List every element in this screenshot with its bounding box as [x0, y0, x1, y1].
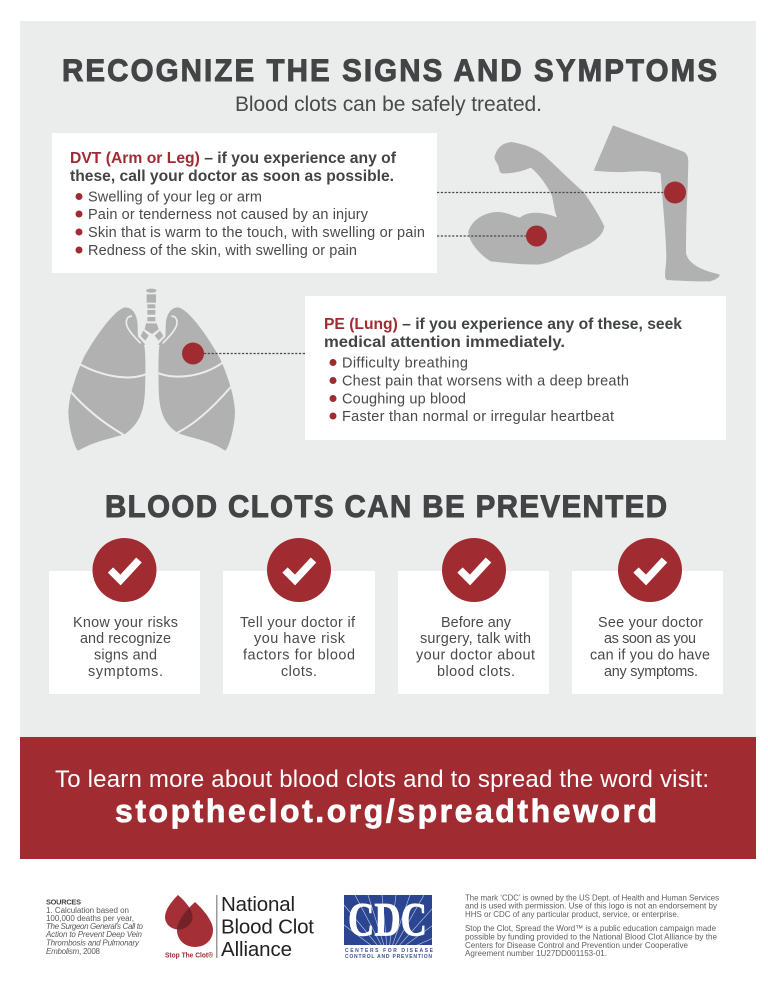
PE symptoms list: Coughing up blood — [342, 392, 466, 408]
PE symptoms list: Faster than normal or irregular heartbeat — [342, 409, 614, 425]
icon: check 2 — [267, 538, 331, 602]
CDC caption: CONTROL AND PREVENTION — [345, 954, 432, 960]
PE heading: medical attention immediately. — [324, 334, 565, 351]
sources: Action to Prevent Deep Vein — [45, 930, 143, 939]
DVT symptoms list: Skin that is warm to the touch, with swelling or pain — [88, 225, 425, 241]
card 4 text: as soon as you — [604, 631, 696, 647]
DVT symptoms list: Redness of the skin, with swelling or pain — [88, 243, 357, 259]
icon: arm — [468, 142, 604, 264]
title: RECOGNIZE THE SIGNS AND SYMPTOMS — [62, 52, 717, 88]
sources: Thrombosis and Pulmonary — [46, 938, 140, 948]
card 1 text: and recognize — [80, 631, 171, 647]
left lung — [68, 307, 145, 451]
heading: blood clots can be prevented: BLOOD CLOTS CAN BE PREVENTED — [105, 488, 667, 524]
DVT symptoms list: Pain or tenderness not caused by an injury — [88, 207, 369, 223]
card 1 text: symptoms. — [88, 664, 163, 680]
lung fissures — [71, 316, 232, 435]
card 4 text: any symptoms. — [604, 664, 698, 680]
icon: check 4 — [618, 538, 682, 602]
PE symptoms list — [330, 356, 629, 425]
card 1 text: Know your risks — [73, 615, 178, 631]
legal text: The mark ‘CDC’ is owned by the US Dept. of Health and Human Services — [465, 892, 719, 902]
DVT heading: these, call your doctor as soon as possible. — [70, 168, 394, 185]
card 4 text: can if you do have — [590, 648, 710, 664]
trachea — [137, 289, 166, 346]
panel: prevention card 1 — [49, 538, 200, 694]
CDC letters: CDC — [348, 894, 427, 946]
card 2 text: factors for blood — [243, 648, 355, 664]
panel: DVT — [52, 133, 437, 273]
icon: check 1 — [92, 538, 156, 602]
CDC caption — [345, 948, 434, 960]
icon: leg clot marker — [664, 182, 686, 204]
icon: leg — [594, 125, 720, 281]
PE symptoms list: Chest pain that worsens with a deep breath — [342, 374, 629, 390]
icon: check 3 — [442, 538, 506, 602]
legal text: Centers for Disease Control and Prevention under Cooperative — [465, 940, 688, 950]
panel: main background — [20, 21, 756, 737]
card 3 text: Before any — [441, 615, 512, 631]
right lung — [158, 307, 235, 451]
DVT heading: DVT (Arm or Leg) – if you experience any of — [70, 150, 394, 167]
legal text — [465, 892, 719, 958]
logo wordmark — [221, 893, 314, 961]
legal text: Stop the Clot, Spread the Word™ is a public education campaign made — [465, 923, 716, 933]
CDC caption: CENTERS FOR DISEASE — [345, 948, 434, 954]
card 2 text — [240, 615, 356, 680]
sources: Embolism, 2008 — [46, 947, 101, 956]
logo tagline: Stop The Clot® — [165, 950, 213, 960]
icon: blood drops — [165, 895, 213, 947]
card 3 text — [416, 615, 535, 680]
card 3 text: your doctor about — [416, 648, 535, 664]
legal text: possible by funding provided to the National Blood Clot Alliance by the — [465, 932, 717, 942]
legal text: Agreement number 1U27DD001153-01. — [465, 948, 607, 958]
sources — [45, 898, 144, 956]
sources: 100,000 deaths per year, — [46, 914, 134, 923]
call to action url: stoptheclot.org/spreadtheword — [115, 793, 657, 829]
card 1 text — [73, 615, 178, 680]
card 3 text: blood clots. — [437, 664, 515, 680]
card 2 text: you have risk — [254, 631, 346, 647]
card 1 text: signs and — [94, 648, 157, 664]
logo wordmark: National — [221, 893, 295, 916]
card 2 text: Tell your doctor if — [240, 615, 356, 631]
panel: prevention card 3 — [398, 538, 549, 694]
call to action text: To learn more about blood clots and to spread the word visit: — [55, 766, 709, 793]
sources: The Surgeon General's Call to — [46, 922, 144, 931]
icon: lung clot marker — [182, 342, 204, 364]
logo: CDC — [344, 895, 433, 958]
subtitle: Blood clots can be safely treated. — [235, 93, 542, 116]
icon: lungs illustration — [68, 289, 305, 451]
panel: PE — [305, 296, 726, 440]
panel: prevention card 2 — [223, 538, 375, 694]
icon: arm clot marker — [526, 226, 547, 246]
panel: call to action band — [20, 737, 756, 859]
icon: arm and leg illustration — [437, 125, 720, 281]
card 2 text: clots. — [281, 664, 317, 680]
card 4 text — [590, 615, 710, 680]
legal text: HHS or CDC of any particular product, service, or enterprise. — [465, 909, 679, 919]
sources: 1. Calculation based on — [46, 906, 129, 915]
DVT symptoms list: Swelling of your leg or arm — [88, 190, 262, 206]
logo wordmark: Alliance — [221, 938, 292, 961]
sources: SOURCES — [46, 898, 81, 906]
DVT symptoms list — [76, 190, 425, 259]
logo wordmark: Blood Clot — [221, 916, 314, 938]
panel: prevention card 4 — [572, 538, 723, 694]
legal text: and is used with permission. Use of this logo is not an endorsement by — [465, 900, 718, 910]
PE symptoms list: Difficulty breathing — [342, 356, 468, 372]
card 4 text: See your doctor — [598, 615, 703, 631]
logo: National Blood Clot Alliance — [165, 893, 314, 961]
card 3 text: surgery, talk with — [420, 631, 531, 647]
PE heading: PE (Lung) – if you experience any of these, seek — [324, 316, 680, 333]
